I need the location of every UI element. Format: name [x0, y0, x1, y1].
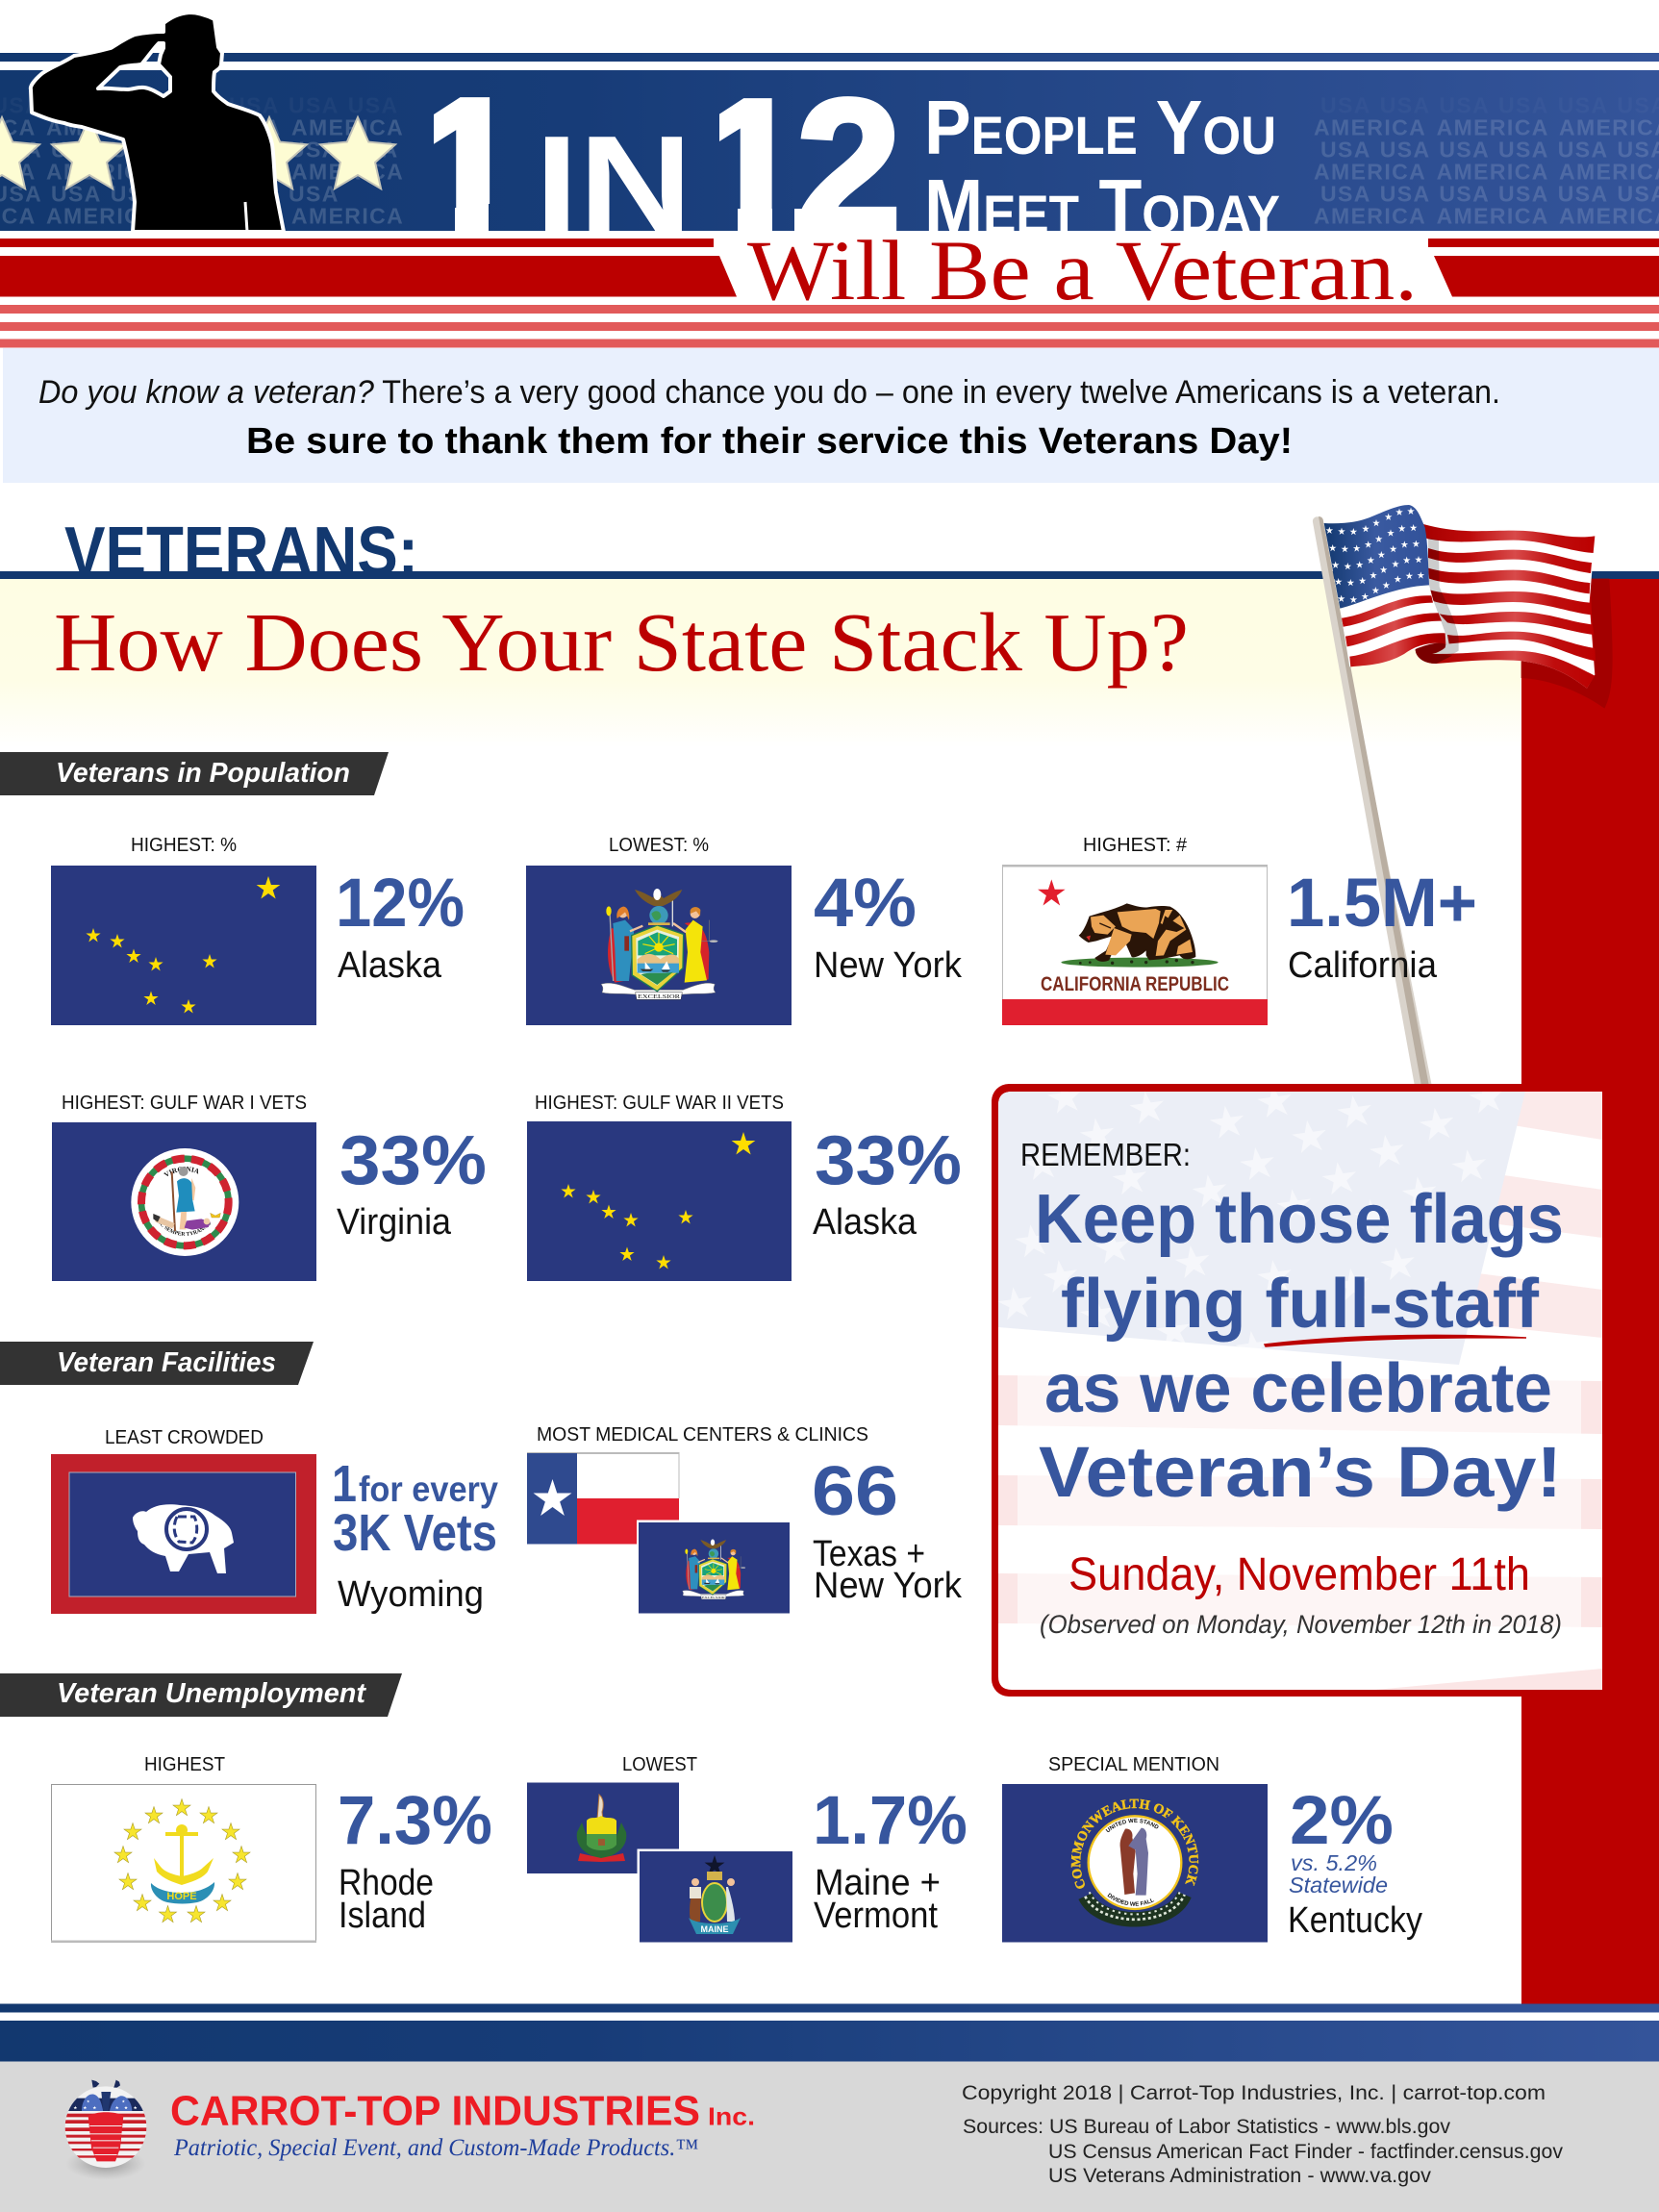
- title: will be a veteran: Will Be a Veteran.: [747, 224, 1418, 318]
- item: Alaska Gulf War II: HIGHEST: GULF WAR II VETS: [535, 1093, 784, 1114]
- flag: Alaska: [51, 866, 316, 1025]
- background word pattern: left: USA: [51, 137, 102, 162]
- background word pattern: right: AMERICA: [1437, 115, 1549, 140]
- background word pattern: right: USA: [1380, 92, 1430, 117]
- icon: waving american flag: [1324, 505, 1613, 709]
- background word pattern: right: USA: [1380, 181, 1430, 206]
- logo tagline: Patriotic, Special Event, and Custom-Made Products.™: [173, 2135, 698, 2161]
- section header: veteran unemployment: [0, 1673, 402, 1717]
- item: Kentucky special mention: 2%: [1290, 1783, 1394, 1859]
- item: Virginia Gulf War I: [52, 1093, 487, 1281]
- background word pattern: right: [1314, 92, 1659, 229]
- flag: California: [1002, 865, 1268, 1025]
- background word pattern: left: USA: [111, 181, 161, 206]
- background word pattern: right: USA: [1558, 137, 1609, 162]
- callout: remember: [992, 1078, 1602, 1697]
- flag: New York: [526, 866, 792, 1025]
- background word pattern: left: AMERICA: [169, 115, 282, 140]
- item: Alaska highest percent: HIGHEST: %: [131, 835, 237, 856]
- intro call to action: Be sure to thank them for their service this Veterans Day!: [246, 421, 1293, 462]
- item: Kentucky special mention: Statewide: [1289, 1873, 1388, 1898]
- flag: Rhode Island: HOPE: [166, 1891, 197, 1902]
- item: California highest number: HIGHEST: #: [1083, 835, 1188, 856]
- item: New York lowest percent: [526, 835, 963, 1025]
- item: Kentucky special mention: Kentucky: [1288, 1900, 1422, 1941]
- item: Texas and New York most medical centers: MOST MEDICAL CENTERS & CLINICS: [537, 1424, 868, 1445]
- background word pattern: right: AMERICA: [1437, 160, 1549, 185]
- background word pattern: left: AMERICA: [46, 115, 159, 140]
- item: Alaska highest percent: 12%: [336, 866, 465, 942]
- title: 1 in 12: Meet Today: [924, 163, 1280, 249]
- icon: flag pole: [1313, 516, 1433, 1092]
- item: Kentucky special mention: SPECIAL MENTION: [1048, 1754, 1219, 1775]
- flag: Texas: [527, 1452, 679, 1545]
- item: Texas and New York most medical centers: 66: [812, 1453, 898, 1530]
- background word pattern: right: AMERICA: [1314, 115, 1426, 140]
- flag: Kentucky: UNITED WE STAND: [1106, 1818, 1158, 1832]
- background word pattern: left: USA: [289, 137, 339, 162]
- footer blue stripes: [0, 2004, 1659, 2062]
- item: Wyoming least crowded: [51, 1427, 498, 1615]
- background word pattern: left: USA: [51, 92, 102, 117]
- background word pattern: left: AMERICA: [46, 204, 159, 229]
- background word pattern: left: AMERICA: [291, 115, 404, 140]
- flag: Kentucky: DIVIDED WE FALL: [1108, 1893, 1154, 1906]
- item: Texas and New York most medical centers: Texas +: [813, 1534, 925, 1574]
- heading: how does your state stack up: How Does Your State Stack Up?: [54, 595, 1189, 689]
- flag: New York small: [637, 1520, 792, 1616]
- icon: row of stars: [0, 117, 395, 189]
- background word pattern: left: AMERICA: [169, 204, 282, 229]
- background word pattern: right: USA: [1498, 181, 1549, 206]
- background word pattern: left: USA: [289, 92, 339, 117]
- top blue stripe: [0, 53, 1659, 62]
- background word pattern: right: AMERICA: [1314, 160, 1426, 185]
- background word pattern: left: AMERICA: [169, 160, 282, 185]
- item: Rhode Island highest unemployment: HIGHEST: [144, 1754, 225, 1775]
- background word pattern: right: USA: [1320, 92, 1371, 117]
- background word pattern: left: USA: [169, 137, 220, 162]
- flag: Wyoming: [51, 1454, 316, 1614]
- item: California highest number: California: [1288, 945, 1438, 986]
- blue banner field: [0, 70, 1659, 231]
- item: New York lowest percent: LOWEST: %: [609, 835, 709, 856]
- title: 1 in 12: People You: [924, 85, 1276, 170]
- flag: Virginia: [52, 1122, 316, 1281]
- background word pattern: left: USA: [51, 181, 102, 206]
- title: 1 in 12: 12: [699, 61, 901, 271]
- item: Kentucky special mention: [1002, 1754, 1422, 1943]
- intro sentence: Do you know a veteran? There’s a very good chance you do – one in every twelve Americans is a veteran.: [38, 374, 1500, 411]
- heading: veterans: VETERANS:: [64, 514, 418, 591]
- stat: 1 for every 3K vets: 3K Vets: [333, 1504, 497, 1562]
- callout message: as we celebrate: [1044, 1350, 1552, 1427]
- callout message: [1035, 1181, 1564, 1512]
- background word pattern: right: USA: [1558, 181, 1609, 206]
- title: 1 in 12: [434, 96, 1279, 231]
- background word pattern: right: USA: [1558, 92, 1609, 117]
- item: Rhode Island highest unemployment: 7.3%: [338, 1783, 492, 1859]
- item: New York lowest percent: New York: [814, 945, 963, 986]
- background word pattern: right: USA: [1439, 137, 1490, 162]
- background word pattern: left: USA: [169, 181, 220, 206]
- flag: Virginia: VIRGINIA: [163, 1167, 198, 1176]
- item: Virginia Gulf War I: HIGHEST: GULF WAR I VETS: [62, 1093, 307, 1114]
- sources: US Census American Fact Finder - factfinder.census.gov: [1048, 2141, 1563, 2163]
- icon: company logo globe: [64, 2080, 147, 2180]
- logo wordmark: CARROT-TOP INDUSTRIES: [170, 2087, 700, 2135]
- item: Maine and Vermont lowest unemployment: [527, 1754, 968, 1945]
- background word pattern: right: USA: [1439, 181, 1490, 206]
- background word pattern: left: USA: [111, 92, 161, 117]
- section header: veterans in population: [0, 752, 389, 795]
- stat: 1 for every 3K vets: [332, 1455, 498, 1562]
- background word pattern: right: USA: [1439, 92, 1490, 117]
- title: 1 in 12: IN: [535, 108, 692, 261]
- item: Virginia Gulf War I: Virginia: [337, 1202, 452, 1243]
- flag: Rhode Island: [51, 1785, 316, 1943]
- background word pattern: left: USA: [348, 137, 398, 162]
- callout date: Sunday, November 11th: [1068, 1549, 1530, 1600]
- background word pattern: left: USA: [111, 137, 161, 162]
- copyright line: Copyright 2018 | Carrot-Top Industries, Inc. | carrot-top.com: [962, 2082, 1546, 2104]
- background word pattern: left: [0, 92, 404, 229]
- item: Wyoming least crowded: Wyoming: [338, 1574, 484, 1615]
- item: Virginia Gulf War I: 33%: [339, 1122, 487, 1199]
- callout observed note: (Observed on Monday, November 12th in 2018): [1040, 1610, 1562, 1639]
- item: Maine and Vermont lowest unemployment: LOWEST: [622, 1754, 697, 1775]
- header banner: [0, 13, 1659, 348]
- callout message: Veteran’s Day!: [1039, 1432, 1562, 1512]
- stat: 1 for every 3K vets: for every: [359, 1470, 498, 1509]
- background word pattern: left: USA: [229, 137, 280, 162]
- section header: veteran facilities: [0, 1342, 314, 1385]
- item: Alaska Gulf War II: 33%: [815, 1122, 962, 1199]
- logo wordmark suffix: Inc.: [708, 2102, 755, 2131]
- sources: [963, 2116, 1563, 2187]
- background word pattern: right: AMERICA: [1314, 204, 1426, 229]
- footer: [0, 2062, 1659, 2212]
- background word pattern: right: USA: [1380, 137, 1430, 162]
- background word pattern: left: USA: [289, 181, 339, 206]
- item: Rhode Island highest unemployment: [51, 1754, 492, 1943]
- background word pattern: left: USA: [229, 92, 280, 117]
- background word pattern: left: AMERICA: [291, 160, 404, 185]
- item: Alaska Gulf War II: Alaska: [813, 1202, 917, 1243]
- background word pattern: right: USA: [1498, 137, 1549, 162]
- item: Kentucky special mention: vs. 5.2%: [1291, 1850, 1377, 1875]
- callout message: flying full-staff: [1061, 1266, 1540, 1343]
- callout background: faded flag: [996, 1078, 1602, 1690]
- background word pattern: right: USA: [1498, 92, 1549, 117]
- flag: Vermont: [527, 1783, 679, 1873]
- background word pattern: left: USA: [229, 181, 280, 206]
- title: 1 in 12: 1: [415, 61, 521, 271]
- section header: veterans in population: Veterans in Population: [56, 758, 350, 789]
- item: Maine and Vermont lowest unemployment: Maine +: [815, 1863, 941, 1903]
- item: Texas and New York most medical centers: [527, 1424, 963, 1616]
- callout label: remember: REMEMBER:: [1020, 1137, 1191, 1172]
- item: Maine and Vermont lowest unemployment: Vermont: [814, 1896, 938, 1936]
- background word pattern: left: USA: [169, 92, 220, 117]
- item: Texas and New York most medical centers: New York: [814, 1566, 963, 1606]
- intro panel: [3, 348, 1659, 483]
- heading band: [0, 514, 1659, 747]
- background word pattern: right: USA: [1320, 181, 1371, 206]
- item: Wyoming least crowded: LEAST CROWDED: [105, 1427, 264, 1448]
- flag: Virginia: SIC SEMPER TYRANNIS: [159, 1223, 211, 1236]
- section header: veteran facilities: Veteran Facilities: [57, 1347, 276, 1378]
- item: Alaska highest percent: Alaska: [338, 945, 442, 986]
- background word pattern: left: USA: [348, 92, 398, 117]
- red side column: [1521, 579, 1659, 2004]
- item: California highest number: 1.5M+: [1287, 866, 1477, 942]
- flag: Maine: MAINE: [700, 1924, 729, 1934]
- flag: California: CALIFORNIA REPUBLIC: [1041, 973, 1229, 995]
- stat: 1 for every 3K vets: 1: [332, 1455, 357, 1513]
- sources: US Veterans Administration - www.va.gov: [1048, 2165, 1432, 2187]
- red and white stripes: [0, 239, 1659, 348]
- flag: Maine: [637, 1848, 794, 1945]
- item: Rhode Island highest unemployment: Island: [339, 1896, 426, 1936]
- item: Alaska Gulf War II: [527, 1093, 962, 1281]
- sources: Sources: US Bureau of Labor Statistics - www.bls.gov: [963, 2116, 1450, 2138]
- background word pattern: right: AMERICA: [1437, 204, 1549, 229]
- background word pattern: left: AMERICA: [291, 204, 404, 229]
- flag: Kentucky: COMMONWEALTH OF KENTUCKY: [1071, 1798, 1198, 1889]
- flag: Kentucky: [1002, 1784, 1268, 1943]
- item: New York lowest percent: 4%: [814, 866, 917, 942]
- flag: Alaska: [527, 1121, 792, 1281]
- background word pattern: right: USA: [1320, 137, 1371, 162]
- callout message: Keep those flags: [1035, 1181, 1564, 1258]
- item: Maine and Vermont lowest unemployment: 1.7%: [813, 1783, 968, 1859]
- red underline: [1265, 1335, 1526, 1346]
- icon: saluting soldier silhouette: [31, 13, 284, 232]
- background word pattern: left: AMERICA: [46, 160, 159, 185]
- item: Alaska highest percent: [51, 835, 465, 1025]
- item: Rhode Island highest unemployment: Rhode: [339, 1863, 434, 1903]
- item: California highest number: [1002, 835, 1477, 1025]
- section header: veteran unemployment: Veteran Unemployment: [57, 1678, 366, 1709]
